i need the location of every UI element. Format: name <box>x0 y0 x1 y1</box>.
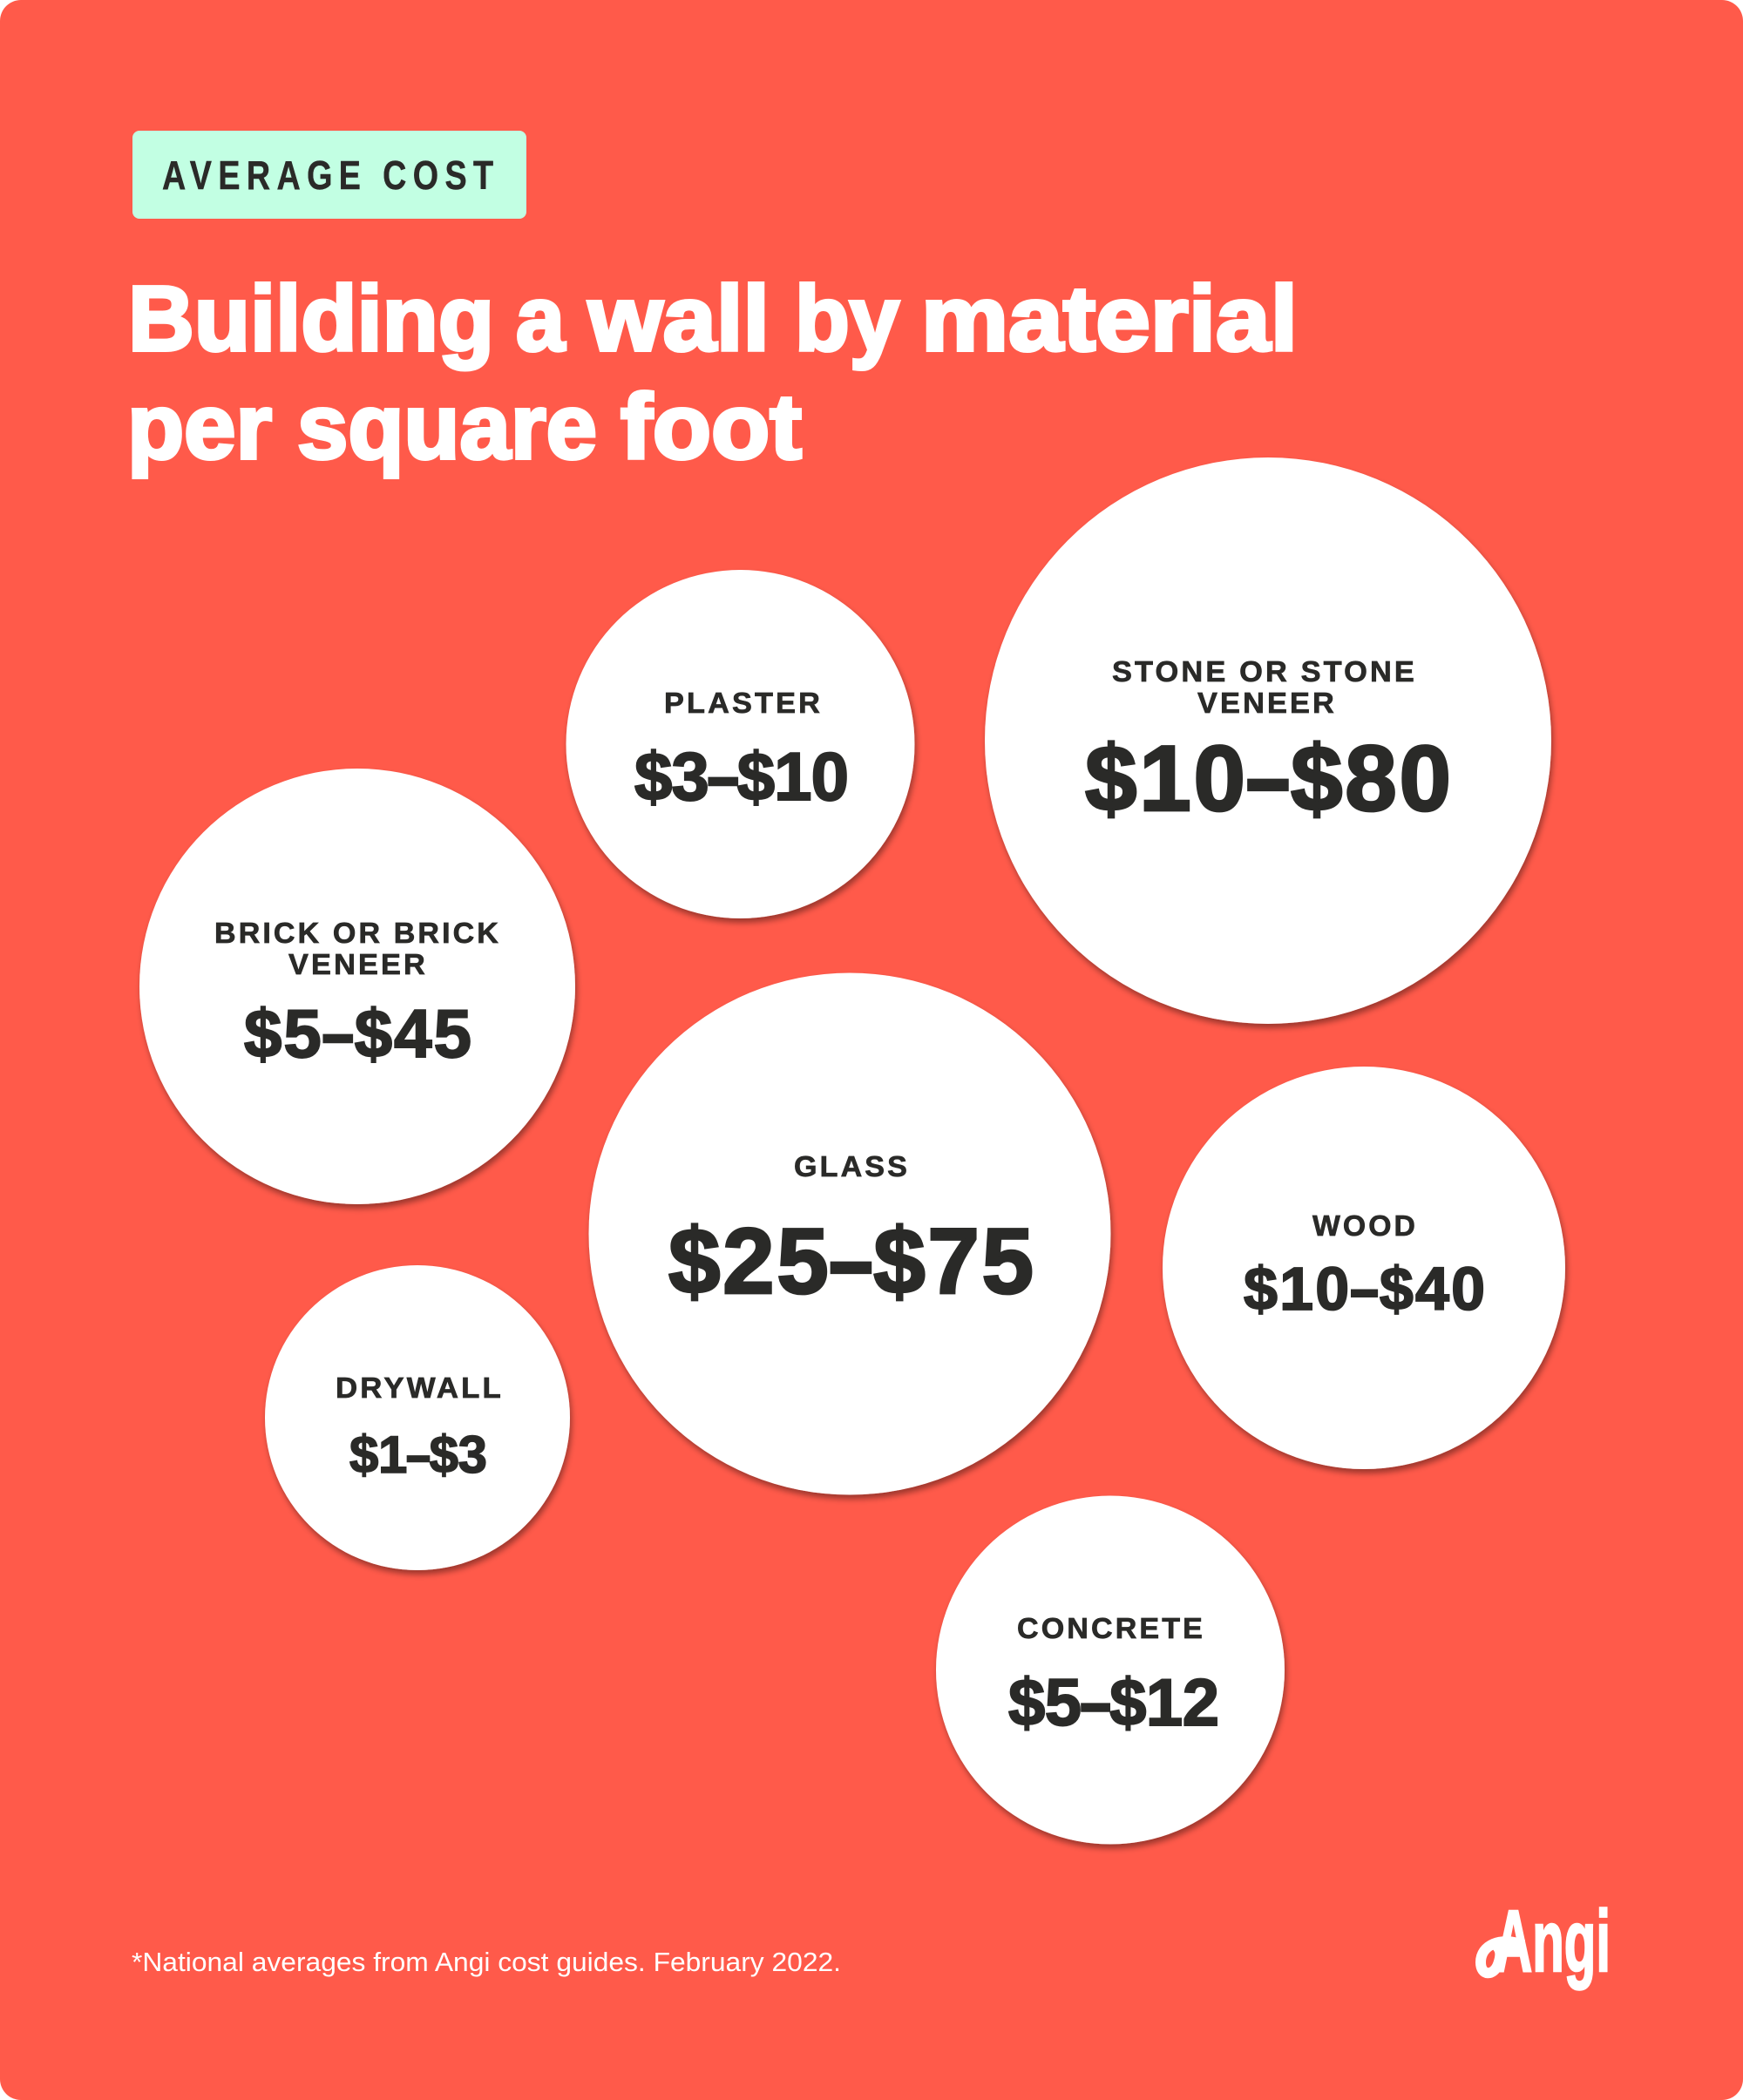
logo: Angi <box>1481 1893 1611 1990</box>
title: Building <box>128 268 494 370</box>
bubble: plaster: $3 <box>634 738 709 815</box>
bubble: brick or brick veneer <box>139 769 575 1204</box>
footnote: *National averages from Angi cost guides. February 2022. <box>132 1947 841 1977</box>
logo: Angi: Angi <box>1495 1893 1611 1990</box>
bubble: drywall: $3 <box>430 1426 487 1484</box>
bubble: glass: GLASS <box>794 1150 910 1182</box>
title: square <box>297 376 597 478</box>
bubble: stone or stone veneer: VENEER <box>1197 687 1337 719</box>
bubble: wood <box>1163 1067 1565 1469</box>
tag: average cost <box>132 131 526 219</box>
bubble: stone or stone veneer: $80 <box>1291 726 1451 830</box>
bubble: concrete: CONCRETE <box>1017 1612 1205 1644</box>
title: material <box>921 268 1298 370</box>
bubble: drywall: $1 <box>349 1426 407 1484</box>
bubble: concrete: $12 <box>1109 1666 1219 1740</box>
bubble: glass: – <box>831 1222 872 1304</box>
bubble: brick or brick veneer: VENEER <box>288 948 428 980</box>
bubble: stone or stone veneer: – <box>1248 739 1288 821</box>
bubble: stone or stone veneer: $10 <box>1085 726 1245 830</box>
bubble: stone or stone veneer <box>985 457 1551 1024</box>
bubble: plaster: PLASTER <box>664 687 823 719</box>
bubble: drywall: DRYWALL <box>336 1372 504 1404</box>
bubble: stone or stone veneer: STONE OR STONE <box>1112 655 1417 688</box>
tag: average cost: AVERAGE COST <box>162 152 499 198</box>
bubble: glass <box>589 972 1110 1495</box>
bubble: wood: $10 <box>1244 1255 1349 1323</box>
bubble: wood: WOOD <box>1312 1209 1418 1242</box>
bubble: drywall: – <box>407 1433 430 1478</box>
bubble: wood: $40 <box>1380 1255 1485 1323</box>
bubble: brick or brick veneer: $45 <box>355 995 471 1072</box>
bubble: concrete <box>936 1495 1285 1844</box>
title: by <box>795 268 899 370</box>
bubble: drywall <box>265 1265 570 1570</box>
title: a <box>516 268 566 370</box>
title: per <box>127 376 272 478</box>
bubble: glass: $25 <box>668 1209 829 1313</box>
bubble: concrete: $5 <box>1008 1666 1082 1740</box>
bubble: brick or brick veneer: – <box>323 1005 353 1064</box>
bubble: brick or brick veneer: $5 <box>244 995 322 1072</box>
bubble: plaster: $10 <box>737 738 849 815</box>
bubble: concrete: – <box>1082 1674 1110 1732</box>
bubble: brick or brick veneer: BRICK OR BRICK <box>214 917 501 949</box>
bubble: wood: – <box>1351 1263 1378 1317</box>
bubble: plaster: – <box>709 748 738 807</box>
title: wall <box>587 268 770 370</box>
title: foot <box>621 376 802 478</box>
bubble: glass: $75 <box>873 1209 1034 1313</box>
bubble: plaster <box>566 570 915 918</box>
title <box>127 268 1298 478</box>
